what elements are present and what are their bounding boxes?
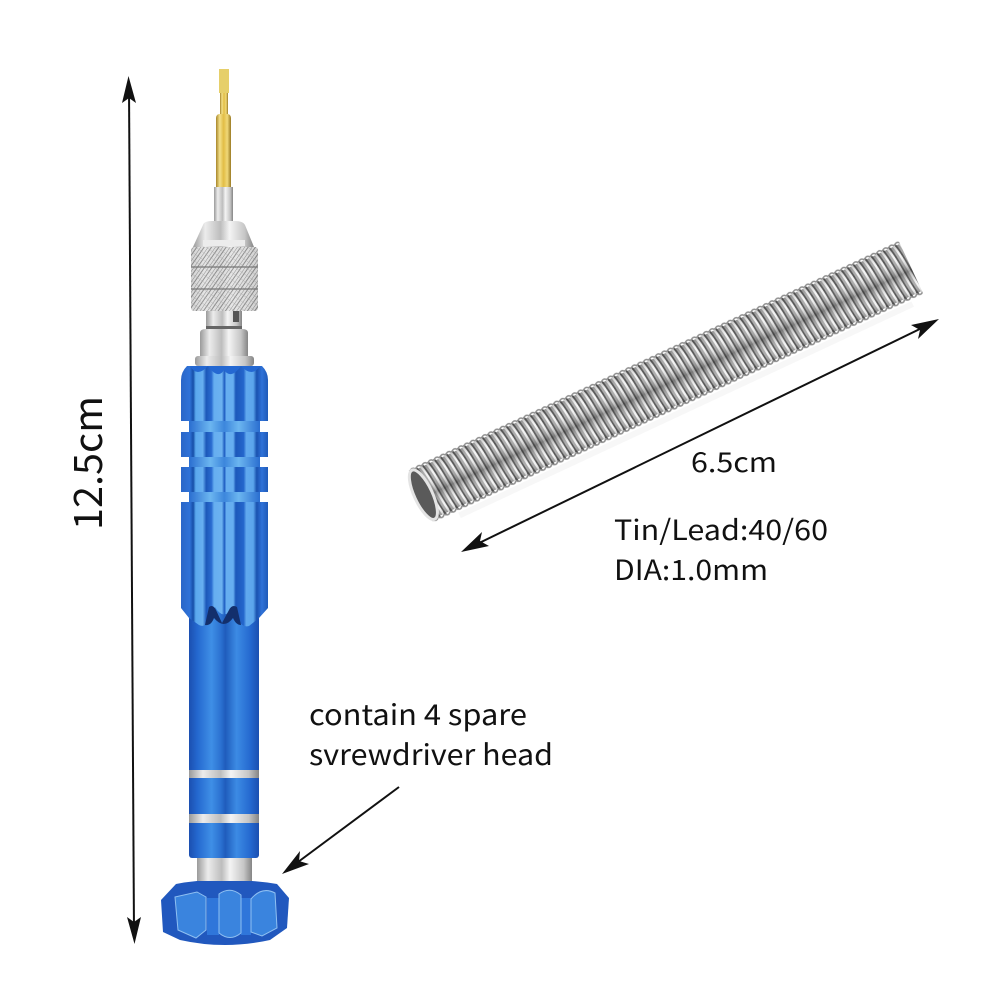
silver neck: [197, 858, 252, 886]
screwdriver tip: [214, 69, 233, 222]
coil mesh shading: [410, 244, 922, 520]
solder specification text: DIA:1.0mm: [614, 549, 768, 589]
coil shadow: [458, 301, 914, 518]
spare heads callout text: [309, 692, 553, 774]
spare heads callout text: svrewdriver head: [309, 732, 553, 774]
blue ribbed handle: [181, 366, 268, 626]
coil open end: [404, 466, 443, 523]
coil body: [408, 239, 924, 524]
blue shaft: [189, 600, 259, 858]
knurled collet: [191, 221, 258, 366]
height dimension arrow: [122, 76, 141, 944]
screwdriver: [161, 69, 289, 945]
solder wire coil: [402, 239, 927, 532]
handle scallops: [205, 606, 241, 625]
height label: 12.5cm: [58, 396, 114, 530]
spare heads callout text: contain 4 spare: [309, 692, 527, 734]
blue end cap: [161, 881, 289, 945]
coil length arrow: [461, 319, 939, 552]
solder specification text: Tin/Lead:40/60: [614, 509, 828, 549]
callout arrow: [282, 787, 399, 874]
solder specification text: [614, 509, 828, 589]
coil length label: 6.5cm: [691, 441, 777, 480]
